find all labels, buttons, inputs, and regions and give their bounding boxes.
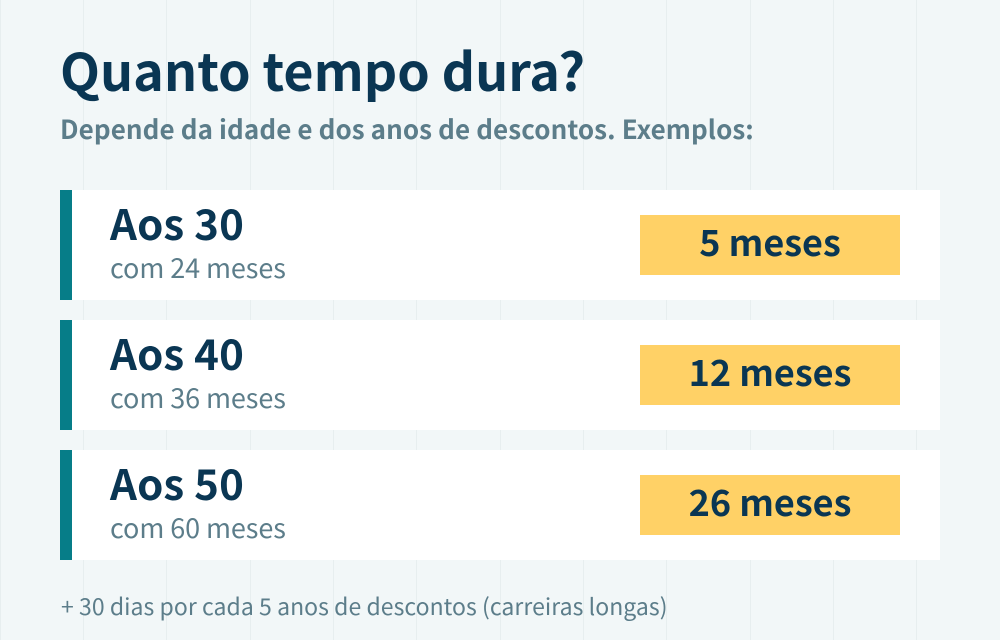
panel: age 40 example <box>60 320 940 430</box>
duration badge <box>640 215 900 275</box>
duration badge <box>640 475 900 535</box>
panel: age 50 example <box>60 450 940 560</box>
age label: Aos 30 <box>110 192 244 253</box>
duration badge: 26 meses <box>689 475 851 527</box>
age label: Aos 50 <box>110 452 244 513</box>
contribution period: com 36 meses <box>110 377 286 416</box>
subtitle: Depende da idade e dos anos de descontos. Exemplos: <box>60 110 754 147</box>
age label: Aos 40 <box>110 322 244 383</box>
contribution period: com 60 meses <box>110 507 286 546</box>
panel: age 30 example <box>60 190 940 300</box>
footnote: + 30 dias por cada 5 anos de descontos (carreiras longas) <box>61 588 668 622</box>
duration badge: 12 meses <box>689 345 851 397</box>
duration badge: 5 meses <box>699 215 841 267</box>
title: Quanto tempo dura? <box>60 31 585 106</box>
duration badge <box>640 345 900 405</box>
contribution period: com 24 meses <box>110 247 286 286</box>
